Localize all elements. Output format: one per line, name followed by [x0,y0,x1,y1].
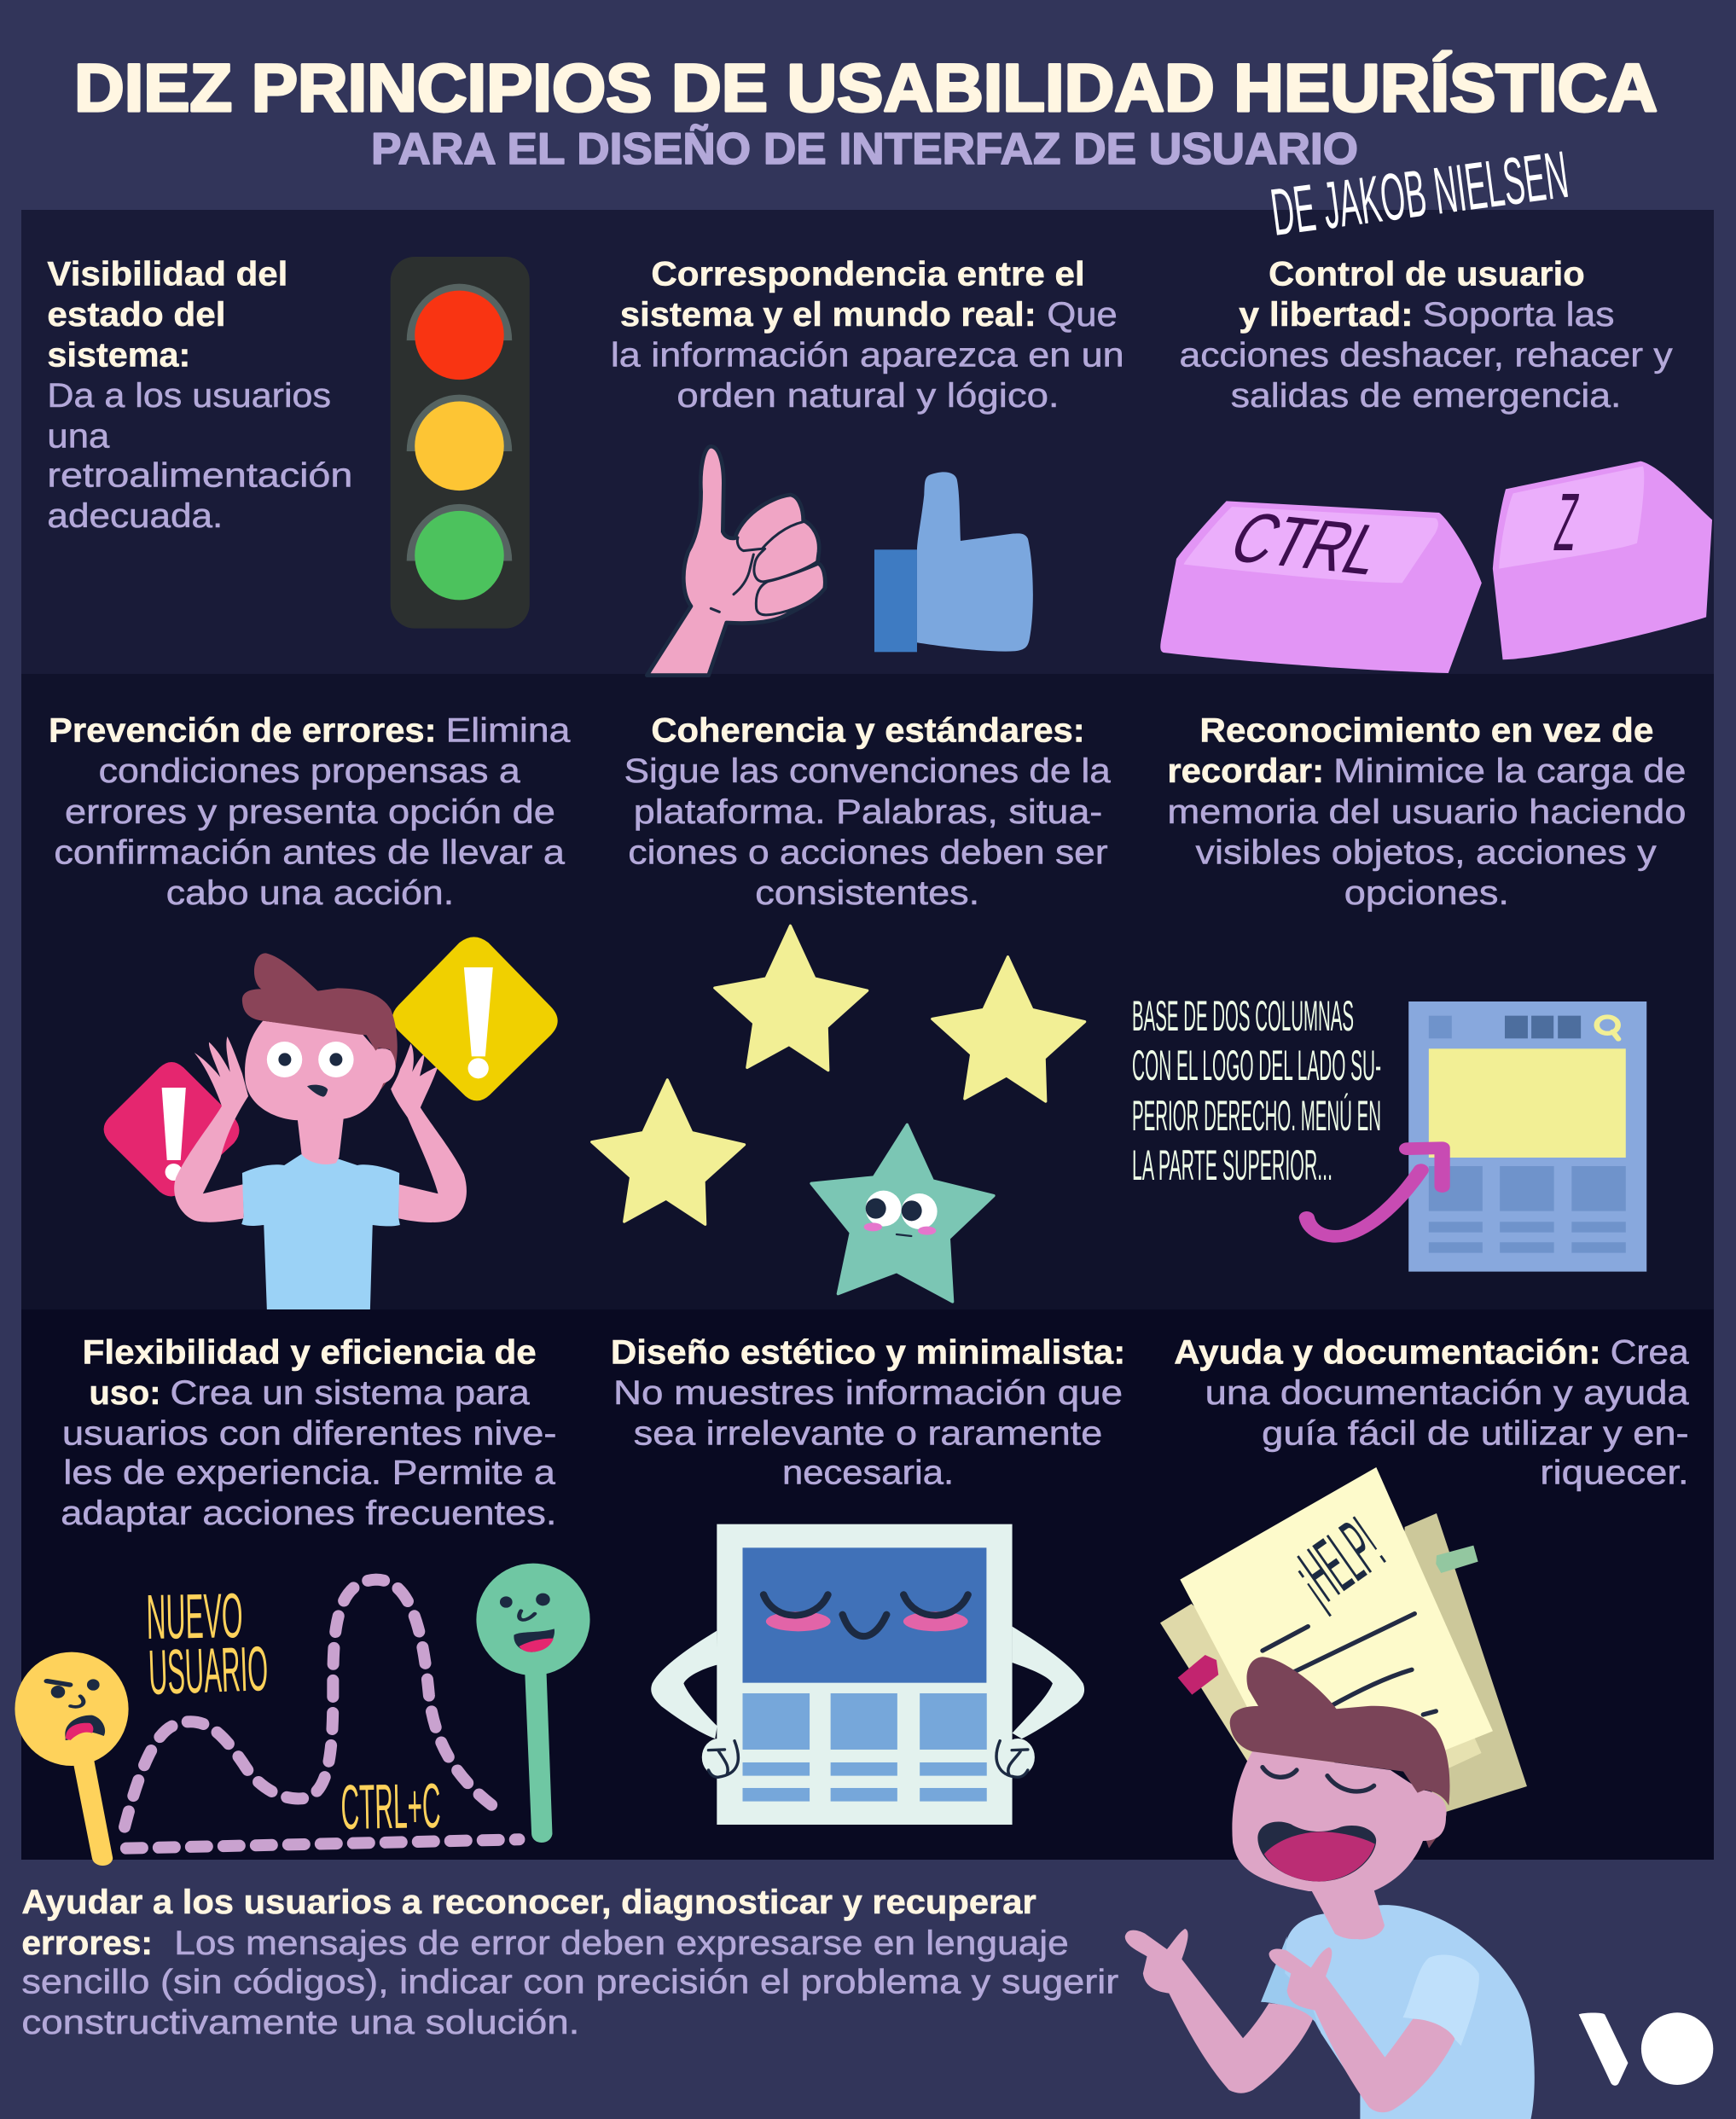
icon: web page wireframe [1408,1001,1646,1272]
text: diseño estético: sea irrelevante o raramente [634,1415,1102,1453]
text: prevención de errores: errores y presenta opción de [65,793,555,831]
chart: dashed learning curve [125,1580,519,1849]
panel: row 1 background [21,210,1714,674]
text: reconocimiento: Reconocimiento en vez de [1199,712,1653,750]
shirt [1261,1828,1535,2119]
text: correspondencia: la información aparezca en un [611,336,1124,374]
chart labels: USUARIO [148,1633,269,1708]
block: reconocimiento [1132,712,1686,1272]
text: flexibilidad: adaptar acciones frecuentes. [61,1495,556,1532]
text: correspondencia: orden natural y lógico. [676,377,1060,415]
text: flexibilidad: Crea un sistema para [171,1374,531,1412]
icon: help documents [1160,1467,1527,1814]
text: prevención de errores: cabo una acción. [166,874,454,912]
text: ayuda: Ayuda y documentación: [1174,1333,1601,1371]
block: diseño estético y minimalista [611,1333,1125,1825]
text: ayudar a los usuarios: Ayudar a los usuarios a reconocer, diagnosticar y recuperar [21,1884,1036,1921]
text: diseño estético: Diseño estético y minimalista: [611,1333,1125,1371]
icon: traffic light [391,257,530,629]
text: prevención de errores: Prevención de errores: [49,712,437,750]
icon: yellow stars [592,926,1085,1224]
arrow: pointing to page content [1307,1148,1443,1236]
text: correspondencia: sistema y el mundo real: [620,296,1036,334]
text: control de usuario: salidas de emergencia. [1231,377,1621,415]
icon: shouting person [1125,1657,1535,2119]
icon: happy green lollipop face [476,1564,590,1843]
title: DIEZ PRINCIPIOS DE USABILIDAD HEURÍSTICA [74,49,1658,125]
text: visibilidad: adecuada. [47,497,223,535]
text: coherencia: Coherencia y estándares: [651,712,1085,750]
icon: help documents: ¡HELP! [1278,1501,1398,1622]
icon: ctrl key [1160,498,1482,673]
text: reconocimiento: recordar: [1167,752,1324,790]
block: correspondencia [611,255,1124,676]
logo [1579,2012,1713,2086]
icon: teal star with face [811,1124,994,1302]
block: prevención de errores [49,712,571,1309]
text: coherencia: ciones o acciones deben ser [628,833,1108,871]
block: ayuda y documentación [1160,1333,1690,1814]
text: coherencia: plataforma. Palabras, situa- [634,793,1102,831]
icon: worried person with warning signs [104,937,558,1309]
text: diseño estético: No muestres información que [613,1374,1123,1412]
text: prevención de errores: Elimina [446,712,571,750]
text: control de usuario: Control de usuario [1269,255,1585,293]
text: visibilidad: retroalimentación [47,456,352,494]
icon: red warning sign [104,1062,240,1196]
text: correspondencia: Que [1047,296,1118,334]
text: flexibilidad: uso: [90,1374,160,1412]
block: reconocimiento: PERIOR DERECHO. MENÚ EN [1132,1092,1381,1140]
text: reconocimiento [1167,712,1686,912]
text: visibilidad: Da a los usuarios [47,377,331,415]
text: control de usuario [1180,255,1673,415]
icon: smiling page character [651,1524,1084,1825]
text: prevención de errores [49,712,571,912]
chart labels: NUEVO [146,1580,243,1652]
icon: yellow warning sign [392,937,558,1100]
block: reconocimiento: CON EL LOGO DEL LADO SU- [1132,1042,1381,1089]
text: ayuda: guía fácil de utilizar y en- [1262,1415,1689,1453]
text: flexibilidad [61,1333,556,1532]
icon: pink thumbs up hand [647,446,826,676]
text: visibilidad [47,255,352,535]
text: control de usuario: y libertad: [1239,296,1414,334]
text: prevención de errores: condiciones propensas a [99,752,521,790]
text: ayudar a los usuarios [21,1884,1118,2041]
text: coherencia: Sigue las convenciones de la [624,752,1112,790]
mouth and arms [1125,1821,1454,2112]
block: coherencia y estándares [592,712,1112,1302]
chart labels [146,1580,441,1843]
text: ayudar a los usuarios: Los mensajes de error deben expresarse en lenguaje [174,1925,1069,1962]
text: diseño estético: necesaria. [782,1454,954,1491]
text: ayuda [1174,1333,1690,1491]
block: visibilidad del estado del sistema [47,255,530,629]
text: flexibilidad: usuarios con diferentes nive- [62,1415,556,1453]
block: reconocimiento: BASE DE DOS COLUMNAS [1132,992,1354,1040]
icon: ctrl key: CTRL [1217,498,1397,589]
text: ayudar a los usuarios: sencillo (sin códigos), indicar con precisión el problema y sugerir [21,1964,1118,2001]
panel: row 2 background [21,674,1714,1309]
neck and head [1232,1751,1447,1939]
text: correspondencia [611,255,1124,415]
text: flexibilidad: Flexibilidad y eficiencia de [83,1333,537,1371]
text: ayudar a los usuarios: constructivamente una solución. [21,2004,579,2041]
text: ayuda: Crea [1611,1333,1690,1371]
text: prevención de errores: confirmación antes de llevar a [54,833,566,871]
text: ayudar a los usuarios: errores: [21,1925,153,1962]
text: visibilidad: Visibilidad del [47,255,287,293]
icon: z key: Z [1550,477,1583,568]
text: diseño estético [611,1333,1125,1491]
panel: row 3 background [21,1309,1714,1860]
text: coherencia: consistentes. [755,874,979,912]
text: coherencia [624,712,1112,912]
block: flexibilidad y eficiencia [15,1333,590,1866]
text: visibilidad: una [47,417,110,455]
text: flexibilidad: les de experiencia. Permite a [63,1454,556,1491]
hair and eyes [1230,1657,1449,1806]
icon: angry yellow lollipop face [15,1652,129,1866]
handwritten note [1132,992,1381,1189]
text: reconocimiento: Minimice la carga de [1333,752,1686,790]
text: reconocimiento: visibles objetos, acciones y [1196,833,1657,871]
handwritten note: LA PARTE SUPERIOR... [1132,1141,1332,1189]
block: flexibilidad y eficiencia: CTRL+C [340,1770,441,1843]
text: ayuda: riquecer. [1540,1454,1689,1491]
icon: z key [1493,462,1712,659]
text: visibilidad: estado del [47,296,225,334]
text: reconocimiento: opciones. [1344,874,1509,912]
text: control de usuario: acciones deshacer, rehacer y [1180,336,1673,374]
icon: blue thumbs up [874,472,1033,652]
subtitle: PARA EL DISEÑO DE INTERFAZ DE USUARIO [371,124,1358,174]
text: reconocimiento: memoria del usuario haciendo [1167,793,1686,831]
text: visibilidad: sistema: [47,336,190,374]
block: control de usuario [1160,255,1712,673]
text: control de usuario: Soporta las [1423,296,1615,334]
text: ayuda: una documentación y ayuda [1205,1374,1690,1412]
text: correspondencia: Correspondencia entre el [651,255,1085,293]
